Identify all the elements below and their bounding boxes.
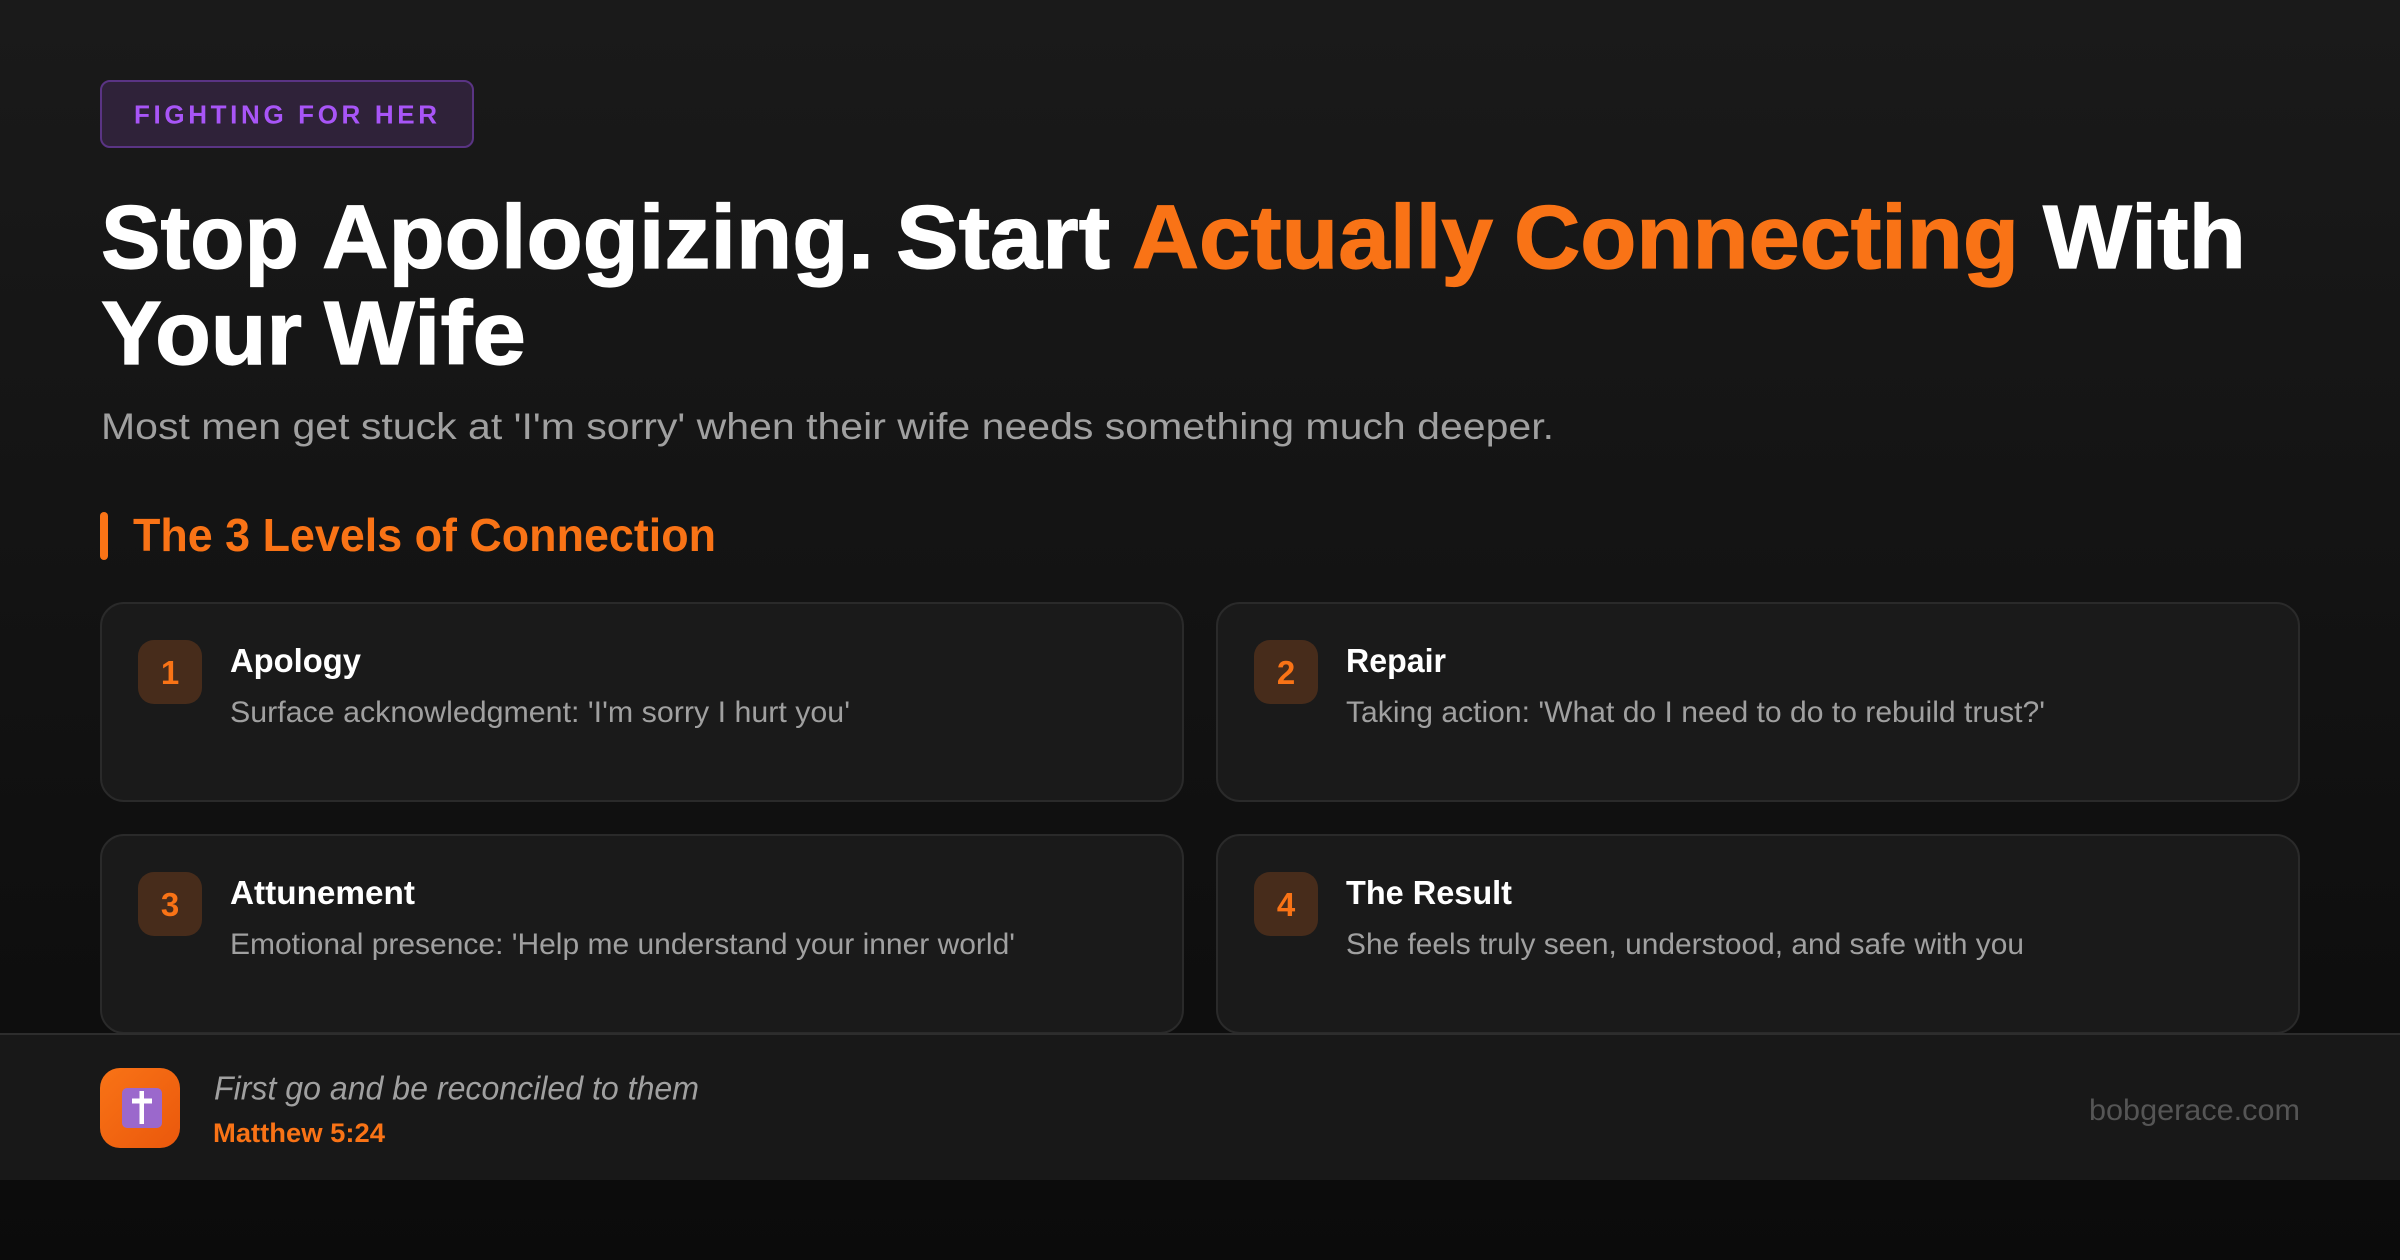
category badge: FIGHTING FOR HER <box>134 100 437 130</box>
footer <box>0 1033 2400 1180</box>
card: Repair: Taking action: 'What do I need to do to rebuild trust?' <box>1346 696 2045 729</box>
card: Attunement: Attunement <box>230 875 415 912</box>
card: Attunement: Emotional presence: 'Help me understand your inner world' <box>230 928 1015 961</box>
section heading: The 3 Levels of Connection <box>133 509 716 561</box>
category badge <box>101 81 473 147</box>
title <box>101 188 2246 384</box>
card: Repair: 2 <box>1277 654 1295 691</box>
card: The Result <box>1217 835 2299 1033</box>
title: Connecting <box>1514 188 2019 288</box>
title: Start <box>896 188 1110 288</box>
scripture quote: First go and be reconciled to them <box>214 1070 699 1106</box>
card: Apology: Surface acknowledgment: 'I'm sorry I hurt you' <box>230 696 850 729</box>
card: The Result: 4 <box>1277 886 1296 923</box>
website: bobgerace.com <box>2089 1094 2300 1127</box>
title: Stop <box>101 188 299 288</box>
card: Repair <box>1217 603 2299 801</box>
subtitle: Most men get stuck at 'I'm sorry' when their wife needs something much deeper. <box>101 405 1554 447</box>
card: Apology <box>101 603 1183 801</box>
card: Repair: Repair <box>1346 643 1446 680</box>
card: Apology: Apology <box>230 643 361 680</box>
scripture reference: Matthew 5:24 <box>213 1118 385 1148</box>
title: Wife <box>324 284 526 384</box>
card: Attunement <box>101 835 1183 1033</box>
title: Apologizing. <box>322 188 874 288</box>
card: The Result: She feels truly seen, understood, and safe with you <box>1346 928 2024 961</box>
icon: cross <box>100 1068 180 1148</box>
title: Your <box>101 284 302 384</box>
card: Attunement: 3 <box>161 886 179 923</box>
card: The Result: The Result <box>1346 875 1512 912</box>
title: With <box>2043 188 2246 288</box>
title: Actually <box>1132 188 1493 288</box>
card: Apology: 1 <box>161 654 179 691</box>
